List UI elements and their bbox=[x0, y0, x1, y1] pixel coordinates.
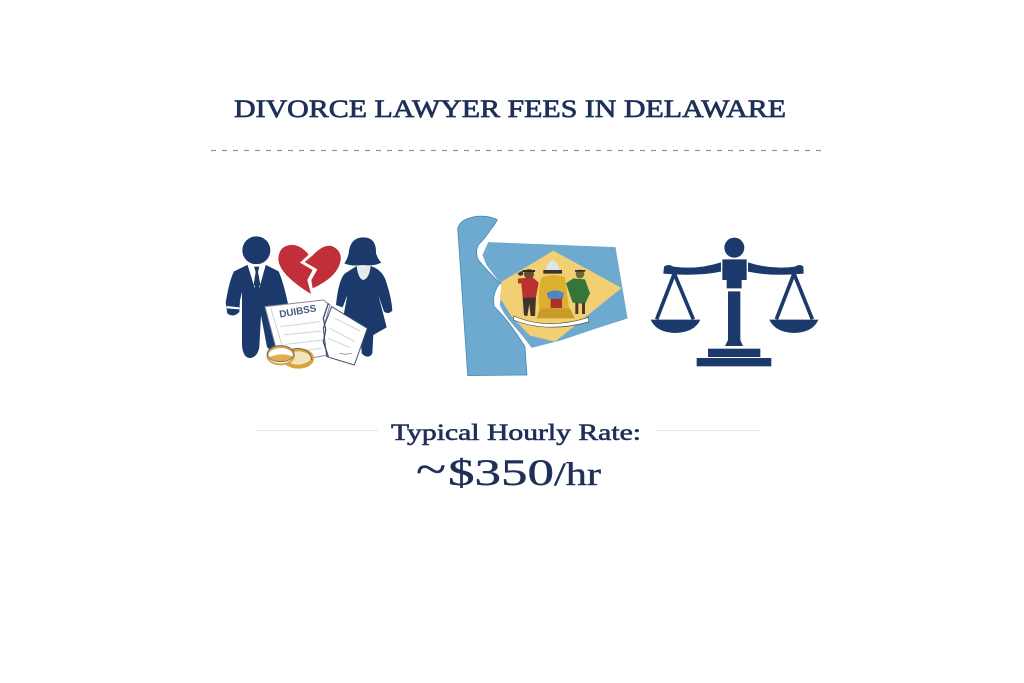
broken heart bbox=[278, 245, 341, 294]
torn divorce papers bbox=[265, 300, 367, 365]
coat of arms bbox=[513, 259, 590, 327]
man bbox=[226, 236, 288, 358]
left pan bbox=[651, 274, 700, 333]
woman bbox=[336, 237, 392, 357]
rate value: /hr bbox=[554, 457, 601, 493]
map: eastern section bbox=[483, 242, 627, 348]
icon: Delaware state map with flag bbox=[458, 216, 627, 376]
right pan bbox=[769, 274, 818, 333]
subheading: typical hourly rate: Typical Hourly Rate: bbox=[391, 420, 641, 445]
farmer bbox=[524, 269, 534, 279]
rate value bbox=[416, 445, 601, 494]
rate value: $350 bbox=[448, 453, 554, 494]
wedding rings bbox=[267, 346, 312, 368]
central shield and sheaves bbox=[539, 275, 570, 315]
map: western strip bbox=[458, 216, 527, 376]
icon: scales of justice bbox=[651, 238, 818, 366]
torn divorce papers: DUIBSS bbox=[279, 303, 318, 321]
ribbon bbox=[513, 316, 589, 327]
flag diamond bbox=[500, 251, 622, 342]
icon: divorcing couple with torn papers and rings bbox=[226, 236, 392, 368]
soldier bbox=[576, 270, 584, 278]
title: DIVORCE LAWYER FEES IN DELAWARE bbox=[234, 96, 786, 123]
rate value: ~ bbox=[416, 445, 446, 494]
